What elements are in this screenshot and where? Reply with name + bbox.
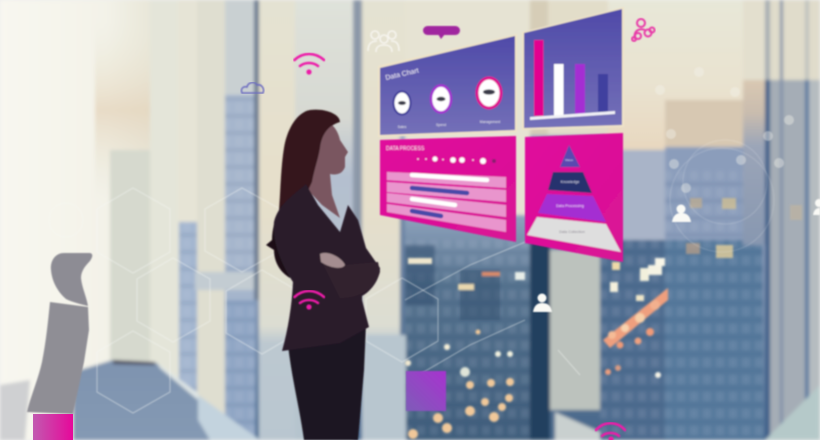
tier 4 [527, 217, 621, 252]
office chair [27, 253, 92, 414]
panel: data chart [378, 34, 517, 137]
floor accent: purple square [406, 371, 446, 411]
icon: person edge [813, 199, 820, 215]
donut labels: Management [480, 120, 500, 124]
panel: data process [380, 136, 516, 242]
tier labels: Data Collection [559, 230, 585, 234]
baseline [530, 111, 615, 120]
panel: pyramid [525, 133, 623, 262]
donut: sales [394, 92, 410, 114]
floor accent: pink square [33, 414, 73, 440]
crossed arms [318, 254, 380, 298]
icon: person right [672, 204, 691, 222]
network nodes [655, 67, 794, 193]
table rows [387, 172, 506, 232]
tier labels: Vision [565, 158, 573, 162]
city lights [405, 198, 802, 439]
donut labels [398, 120, 500, 129]
timeline dots [417, 156, 496, 164]
hair [278, 110, 340, 226]
tier labels: Data Processing [556, 204, 584, 208]
legs [288, 325, 366, 440]
donut labels: Sales [398, 125, 407, 129]
icon: speech bubble [423, 26, 460, 39]
tier labels [556, 158, 585, 234]
donut: management [477, 78, 501, 108]
icon: people group [368, 31, 399, 52]
progress bars [412, 175, 487, 216]
tier 1 [560, 145, 580, 167]
icon: person middle [533, 294, 552, 312]
face and neck [308, 118, 348, 218]
jacket [274, 184, 380, 351]
tier 3 [538, 194, 606, 222]
woman standing [266, 110, 380, 440]
icon: wifi bottom [596, 423, 625, 440]
icon: wifi top [294, 54, 324, 75]
panel: bar chart [522, 7, 624, 130]
donut labels: Spend [436, 123, 446, 127]
hexagon network overlay [49, 140, 774, 413]
panel title: Data Chart [385, 68, 419, 82]
bars [534, 40, 544, 116]
donut: spend [431, 86, 451, 112]
tier labels: Knowledge [561, 180, 579, 184]
icon: cloud [241, 83, 264, 93]
icon: person with gears [632, 19, 654, 41]
panel title: DATA PROCESS [386, 146, 425, 152]
icon: wifi middle [294, 291, 324, 310]
tier 2 [548, 172, 592, 193]
hand [320, 253, 345, 268]
